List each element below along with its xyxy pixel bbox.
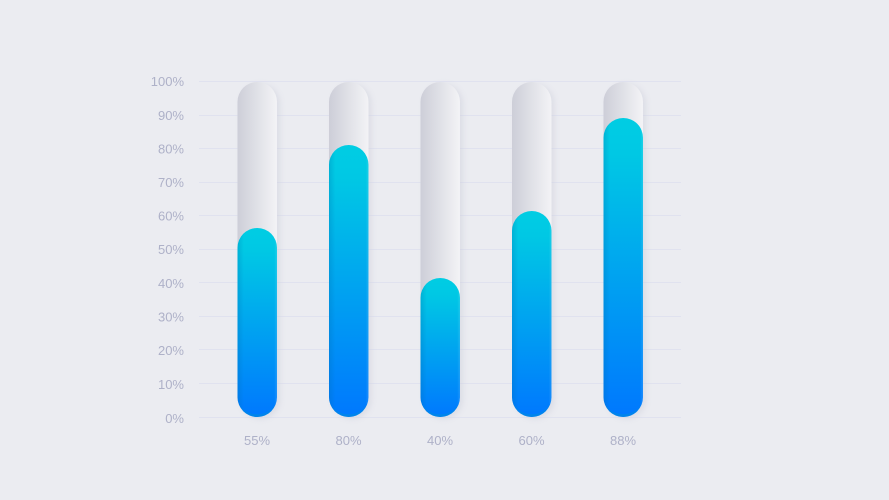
x-axis value labels: 60% xyxy=(518,433,545,448)
x-axis value labels: 40% xyxy=(427,433,453,448)
x-axis value labels: 80% xyxy=(335,433,362,448)
bar: 40% xyxy=(420,82,463,419)
bar: 80% xyxy=(329,82,372,419)
x-axis value labels xyxy=(244,433,636,448)
bar: 55% xyxy=(238,82,280,419)
y-axis labels: 90% xyxy=(158,108,184,123)
y-axis labels: 70% xyxy=(158,175,184,190)
y-axis labels: 100% xyxy=(151,74,184,89)
y-axis labels: 0% xyxy=(165,411,184,426)
bar: 60% xyxy=(512,82,554,419)
y-axis labels: 50% xyxy=(158,242,184,257)
y-axis labels: 20% xyxy=(158,343,184,358)
x-axis value labels: 88% xyxy=(610,433,636,448)
y-axis labels: 60% xyxy=(158,208,184,224)
y-axis labels xyxy=(151,74,184,426)
bar: 88% xyxy=(604,82,646,419)
y-axis labels: 10% xyxy=(158,377,184,392)
x-axis value labels: 55% xyxy=(244,433,270,448)
y-axis labels: 30% xyxy=(158,310,184,324)
y-axis labels: 40% xyxy=(158,276,184,291)
y-axis labels: 80% xyxy=(158,142,184,156)
